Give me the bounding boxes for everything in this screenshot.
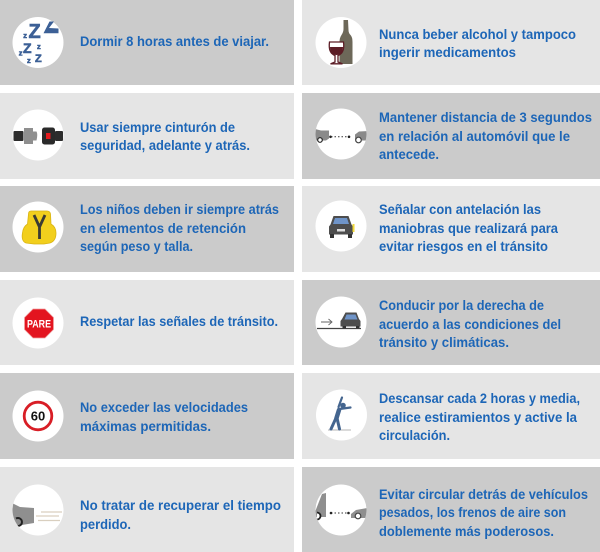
text: senalar: maniobras que realizará para: [379, 220, 558, 236]
text: descansar: [379, 390, 580, 443]
text: alcohol: ingerir medicamentos: [379, 44, 516, 60]
icon: speed limit: [12, 390, 64, 442]
icon: stop sign: PARE: [27, 318, 51, 330]
text: derecha: [379, 297, 561, 350]
icon: sleep: Z: [23, 40, 32, 56]
panel: vehiculos pesados: [302, 467, 600, 552]
text: ninos: en elementos de retención: [80, 220, 246, 236]
text: senalar: [379, 201, 558, 254]
text: alcohol: [379, 26, 576, 60]
text: velocidades: No exceder las velocidades: [80, 399, 248, 415]
icon: sleep: z: [37, 42, 41, 51]
icon: sleep: z: [19, 48, 23, 58]
icon: sleep: Z: [35, 53, 42, 65]
text: vehiculos pesados: doblemente más poderosos.: [379, 523, 554, 539]
icon: sleep: z: [23, 31, 27, 40]
panel: velocidades: [0, 373, 294, 459]
panel: derecha: [302, 280, 600, 365]
icon: sleep: [12, 17, 64, 68]
text: senalar: evitar riesgos en el tránsito: [379, 238, 548, 254]
text: distancia: [379, 109, 592, 162]
icon: wine: [316, 17, 366, 68]
panel: senales: [0, 280, 294, 365]
panel: descansar: [302, 373, 600, 459]
icon: seat belt: [12, 110, 64, 160]
text: dormir: Dormir 8 horas antes de viajar.: [80, 33, 269, 49]
text: distancia: antecede.: [379, 146, 439, 162]
icon: car distance: [315, 108, 368, 160]
icon: stop sign: [12, 298, 64, 348]
text: velocidades: [80, 399, 248, 434]
icon: child seat: [12, 202, 64, 252]
text: alcohol: Nunca beber alcohol y tampoco: [379, 26, 576, 42]
text: ninos: según peso y talla.: [80, 238, 193, 254]
text: ninos: Los niños deben ir siempre atrás: [80, 201, 279, 217]
text: tiempo: No tratar de recuperar el tiempo: [80, 497, 281, 513]
icon: car speeding away: [12, 484, 64, 536]
panel: distancia: [302, 93, 600, 179]
text: cinturon: Usar siempre cinturón de: [80, 119, 235, 135]
icon: stretching person: [316, 390, 367, 440]
panel: alcohol: [302, 0, 600, 85]
icon: truck distance: [315, 484, 367, 536]
text: ninos: [80, 201, 279, 254]
icon: sleep: Z: [28, 21, 41, 43]
text: derecha: Conducir por la derecha de: [379, 297, 544, 313]
text: senales: Respetar las señales de tránsito.: [80, 313, 278, 329]
text: cinturon: seguridad, adelante y atrás.: [80, 137, 250, 153]
panel: cinturon: [0, 93, 294, 179]
panel: tiempo: [0, 467, 294, 552]
icon: car signalling: [316, 200, 366, 252]
text: derecha: acuerdo a las condiciones del: [379, 316, 561, 332]
text: cinturon: [80, 119, 250, 153]
text: velocidades: máximas permitidas.: [80, 418, 211, 434]
text: descansar: circulación.: [379, 427, 450, 443]
text: descansar: realice estiramientos y active la: [379, 409, 577, 425]
text: vehiculos pesados: pesados, los frenos de aire son: [379, 504, 566, 520]
text: tiempo: [80, 497, 281, 532]
text: tiempo: perdido.: [80, 516, 131, 532]
icon: car on right: [316, 296, 366, 348]
panel: ninos: [0, 186, 294, 272]
panel: senalar: [302, 186, 600, 272]
panel: dormir: [0, 0, 294, 85]
text: descansar: Descansar cada 2 horas y media,: [379, 390, 580, 406]
text: distancia: en relación al automóvil que le: [379, 128, 570, 144]
text: senalar: Señalar con antelación las: [379, 201, 541, 217]
icon: sleep: z: [27, 56, 31, 65]
text: vehiculos pesados: [379, 486, 588, 539]
icon: speed limit: 60: [31, 408, 45, 424]
text: derecha: tránsito y climáticas.: [379, 334, 509, 350]
